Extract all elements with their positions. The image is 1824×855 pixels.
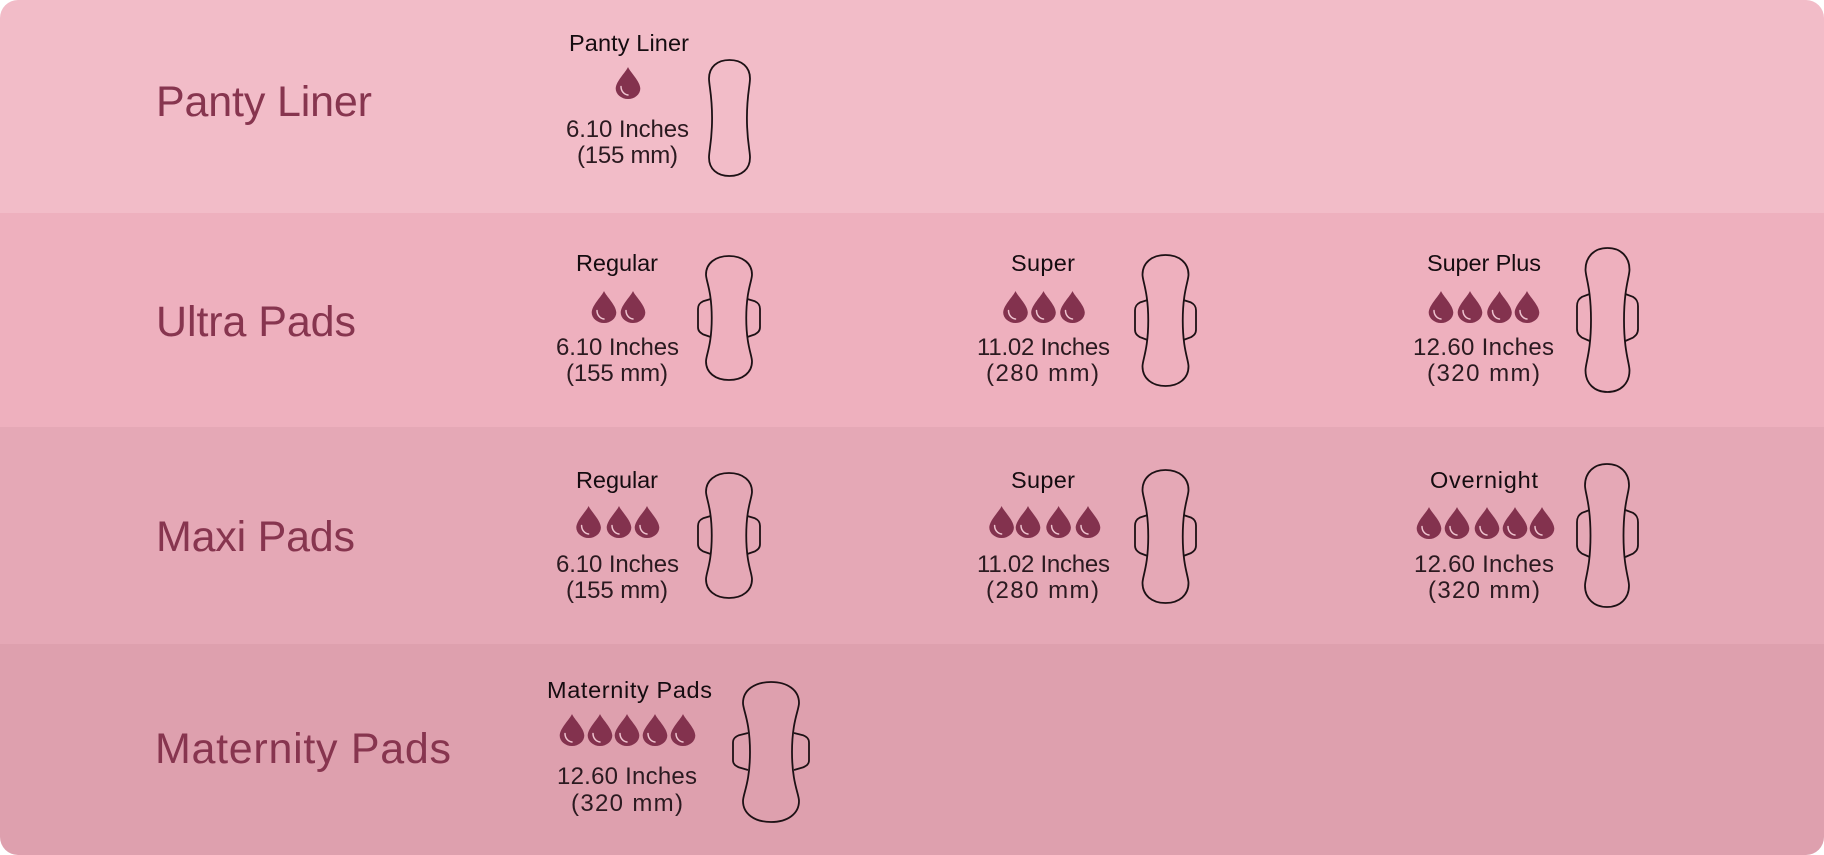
product: maternity pads: Maternity Pads bbox=[547, 677, 712, 703]
product: maxi super: Super bbox=[1011, 467, 1075, 493]
product: ultra regular: 6.10 Inches bbox=[556, 334, 679, 361]
icon: ultra super plus pad outline bbox=[1577, 248, 1638, 392]
product: ultra super bbox=[977, 250, 1196, 387]
icon: ultra super pad outline bbox=[1135, 255, 1196, 386]
icon: three drops bbox=[1003, 291, 1085, 323]
icon: overnight pad outline bbox=[1577, 464, 1638, 607]
product: maternity pads bbox=[547, 677, 809, 822]
product: maxi super bbox=[977, 467, 1196, 604]
icon: maxi super pad outline bbox=[1135, 470, 1196, 603]
icon: three drops bbox=[576, 506, 659, 538]
product: ultra super: 11.02 Inches bbox=[977, 334, 1110, 361]
product: maternity pads: (320 mm) bbox=[571, 790, 683, 817]
product: maternity pads: 12.60 Inches bbox=[557, 763, 697, 790]
product: maxi regular: 6.10 Inches bbox=[556, 551, 679, 578]
product: maxi regular bbox=[556, 467, 760, 604]
heading: maternity pads: Maternity Pads bbox=[155, 725, 451, 773]
panel: panty liner row bbox=[0, 0, 1824, 213]
product: ultra regular: (155 mm) bbox=[566, 360, 668, 387]
icon: ultra regular pad outline bbox=[698, 256, 760, 380]
product: ultra super: Super bbox=[1011, 250, 1075, 276]
product: panty liner: 6.10 Inches bbox=[566, 116, 689, 143]
product: maxi overnight: (320 mm) bbox=[1428, 577, 1540, 604]
panel: maxi pads row bbox=[0, 427, 1824, 644]
icon: one drop bbox=[616, 67, 640, 99]
product: ultra super plus: 12.60 Inches bbox=[1413, 334, 1554, 361]
product: maxi overnight bbox=[1414, 464, 1638, 607]
icon: five drops bbox=[1417, 507, 1554, 539]
icon: liner outline bbox=[709, 60, 750, 176]
product: maxi overnight: 12.60 Inches bbox=[1414, 551, 1554, 578]
product: maxi super: (280 mm) bbox=[986, 577, 1099, 604]
product: ultra super plus: Super Plus bbox=[1427, 250, 1541, 276]
heading: panty liner: Panty Liner bbox=[156, 78, 372, 126]
icon: four drops bbox=[989, 506, 1100, 538]
product: maxi overnight: Overnight bbox=[1430, 467, 1538, 493]
icon: maxi regular pad outline bbox=[698, 473, 760, 598]
product: maxi regular: Regular bbox=[576, 467, 658, 493]
product: ultra super: (280 mm) bbox=[986, 360, 1099, 387]
product: panty liner: (155 mm) bbox=[577, 142, 678, 169]
panel: maternity pads row bbox=[0, 644, 1824, 855]
product: maxi regular: (155 mm) bbox=[566, 577, 668, 604]
panel: ultra pads row bbox=[0, 213, 1824, 427]
heading: maxi pads: Maxi Pads bbox=[156, 513, 355, 561]
product: panty liner bbox=[566, 30, 750, 176]
product: panty liner: Panty Liner bbox=[569, 30, 689, 56]
product: ultra super plus: (320 mm) bbox=[1427, 360, 1540, 387]
icon: four drops bbox=[1429, 291, 1539, 323]
icon: five drops bbox=[560, 714, 695, 746]
heading: ultra pads: Ultra Pads bbox=[156, 298, 356, 346]
product: ultra regular bbox=[556, 250, 760, 387]
icon: maternity pad outline bbox=[733, 682, 809, 822]
product: ultra regular: Regular bbox=[576, 250, 658, 276]
product: maxi super: 11.02 Inches bbox=[977, 551, 1110, 578]
product: ultra super plus bbox=[1413, 248, 1638, 392]
icon: two drops bbox=[592, 291, 645, 323]
